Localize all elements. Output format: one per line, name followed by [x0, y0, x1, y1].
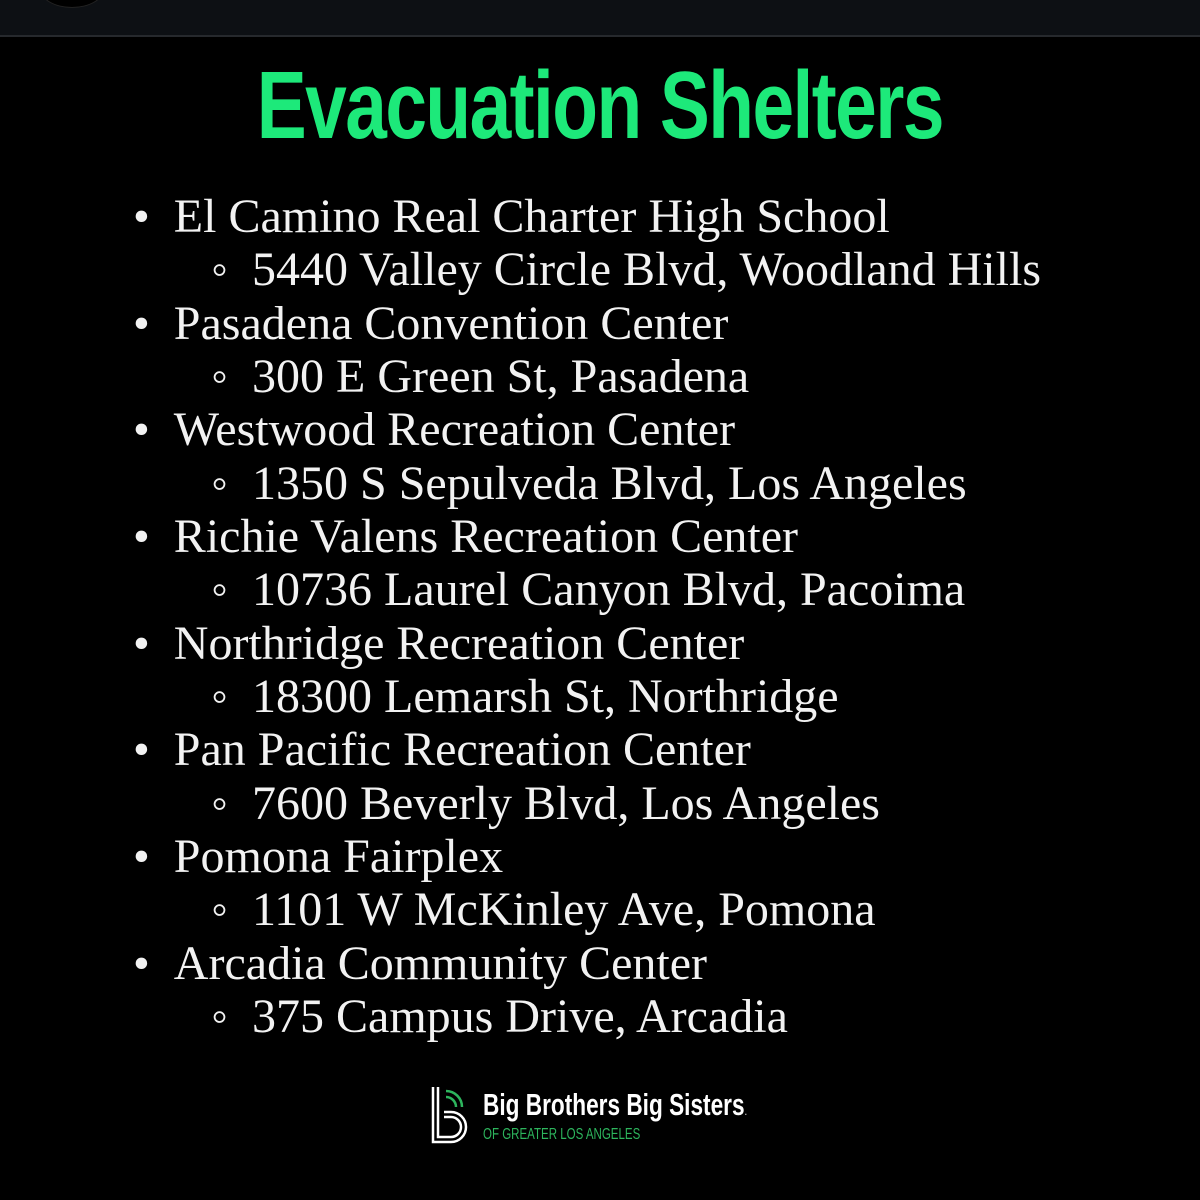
text: ◦ 18300 Lemarsh St, Northridge: [211, 670, 839, 723]
text: • Pasadena Convention Center: [133, 297, 728, 350]
text: ◦ 1350 S Sepulveda Blvd, Los Angeles: [211, 457, 967, 510]
logo: [432, 1087, 747, 1144]
icon: logo mark: [432, 1087, 468, 1144]
text: • Richie Valens Recreation Center: [133, 510, 798, 563]
text: ◦ 300 E Green St, Pasadena: [211, 350, 749, 403]
title: Evacuation Shelters: [257, 52, 943, 159]
text: ◦ 10736 Laurel Canyon Blvd, Pacoima: [211, 563, 965, 616]
text: • El Camino Real Charter High School: [133, 190, 890, 243]
text: • Westwood Recreation Center: [133, 403, 735, 456]
text: ◦ 5440 Valley Circle Blvd, Woodland Hills: [211, 243, 1041, 296]
text: • Arcadia Community Center: [133, 937, 707, 990]
text: • Pan Pacific Recreation Center: [133, 723, 751, 776]
shelter list: [133, 190, 1041, 1043]
text: ◦ 1101 W McKinley Ave, Pomona: [211, 883, 876, 936]
logo text: Big Brothers Big Sisters.: [483, 1087, 747, 1122]
text: ◦ 7600 Beverly Blvd, Los Angeles: [211, 777, 880, 830]
text: • Pomona Fairplex: [133, 830, 503, 883]
text: • Northridge Recreation Center: [133, 617, 744, 670]
top bar: [0, 0, 1200, 37]
logo: OF GREATER LOS ANGELES: [483, 1126, 640, 1143]
text: ◦ 375 Campus Drive, Arcadia: [211, 990, 788, 1043]
